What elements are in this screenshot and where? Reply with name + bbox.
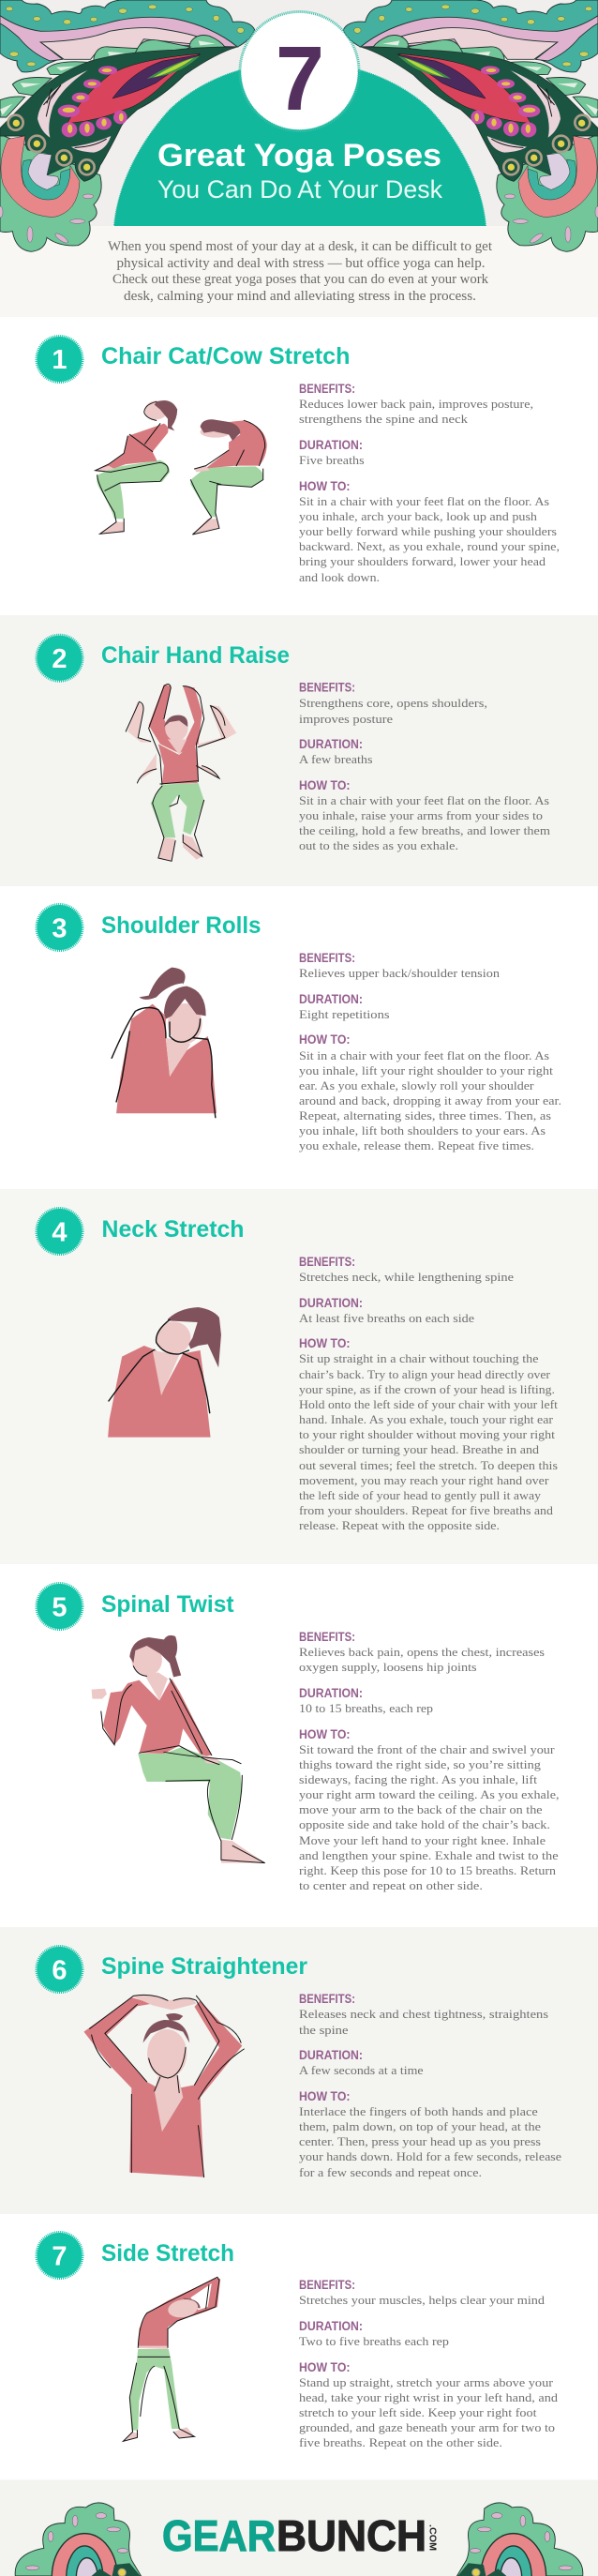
- footer ornament left: [15, 2503, 142, 2576]
- text: benefits, duration, how to: Hold onto the left side of your chair with your left: [299, 1397, 558, 1411]
- badge 4: [37, 1208, 82, 1255]
- badge 6: 6: [52, 1956, 67, 1986]
- text: benefits, duration, how to: for a few seconds and repeat once.: [299, 2165, 482, 2179]
- intro text: When you spend most of your day at a desk, it can be difficult to get: [108, 239, 492, 254]
- text: benefits, duration, how to: out several times; feel the stretch. To deepen this: [299, 1458, 558, 1472]
- panel: pose 1: [0, 317, 598, 615]
- text: benefits, duration, how to: to center and repeat on other side.: [299, 1878, 483, 1892]
- text: benefits, duration, how to: center. Then, press your head up as you press: [299, 2134, 541, 2148]
- text: benefits, duration, how to: Sit in a chair with your feet flat on the floor. As: [299, 1048, 549, 1062]
- text: benefits, duration, how to: [299, 2278, 559, 2449]
- text: benefits, duration, how to: bring your shoulders forward, lower your head: [299, 554, 546, 568]
- text: benefits, duration, how to: 10 to 15 breaths, each rep: [299, 1701, 433, 1715]
- text: benefits, duration, how to: Sit toward the front of the chair and swivel your: [299, 1742, 555, 1756]
- panel: pose 5: [0, 1564, 598, 1927]
- text: benefits, duration, how to: from your shoulders. Repeat for five breaths and: [299, 1503, 554, 1517]
- text: benefits, duration, how to: DURATION:: [299, 438, 363, 452]
- text: benefits, duration, how to: HOW TO:: [299, 778, 351, 792]
- intro text: physical activity and deal with stress — but office yoga can help.: [116, 256, 486, 271]
- text: benefits, duration, how to: Relieves back pain, opens the chest, increases: [299, 1645, 545, 1659]
- badge 3: 3: [52, 913, 67, 943]
- text: benefits, duration, how to: them, palm down, on top of your head, at the: [299, 2119, 541, 2133]
- heading: Shoulder Rolls: [101, 912, 261, 939]
- text: benefits, duration, how to: you inhale, lift both shoulders to your ears. As: [299, 1123, 546, 1137]
- badge 2: 2: [52, 644, 67, 674]
- text: benefits, duration, how to: ear. As you exhale, slowly roll your shoulder: [299, 1078, 534, 1092]
- panel: pose 6: [0, 1927, 598, 2214]
- text: benefits, duration, how to: thighs toward the right side, so you’re sitting: [299, 1757, 542, 1771]
- text: benefits, duration, how to: HOW TO:: [299, 2089, 351, 2103]
- heading: Neck Stretch: [101, 1216, 244, 1243]
- text: benefits, duration, how to: strengthens the spine and neck: [299, 412, 469, 426]
- text: benefits, duration, how to: sideways, facing the right. As you inhale, lift: [299, 1772, 537, 1786]
- text: benefits, duration, how to: BENEFITS:: [299, 1255, 355, 1269]
- text: benefits, duration, how to: head, take your right wrist in your left hand, and: [299, 2390, 559, 2404]
- logo: GearBunch.com: [162, 2511, 437, 2560]
- text: benefits, duration, how to: stretch to your left side. Keep your right foot: [299, 2405, 537, 2419]
- badge 1: [37, 336, 82, 383]
- text: benefits, duration, how to: Strengthens core, opens shoulders,: [299, 696, 487, 710]
- text: benefits, duration, how to: HOW TO:: [299, 2360, 351, 2374]
- heading: Spinal Twist: [101, 1591, 234, 1618]
- text: benefits, duration, how to: BENEFITS:: [299, 382, 355, 396]
- text: benefits, duration, how to: your belly forward while pushing your shoulders: [299, 524, 557, 538]
- text: benefits, duration, how to: the ceiling, hold a few breaths, and lower them: [299, 823, 550, 837]
- text: benefits, duration, how to: Reduces lower back pain, improves posture,: [299, 397, 533, 411]
- illustration: hands on head: [83, 1995, 244, 2177]
- badge 1: 1: [52, 345, 67, 375]
- text: benefits, duration, how to: Sit in a chair with your feet flat on the floor. As: [299, 494, 549, 508]
- text: benefits, duration, how to: A few seconds at a time: [299, 2063, 424, 2077]
- text: benefits, duration, how to: oxygen supply, loosens hip joints: [299, 1660, 477, 1674]
- logo: GearBunch.com: GEAR: [162, 2511, 276, 2560]
- text: benefits, duration, how to: Sit in a chair with your feet flat on the floor. As: [299, 793, 549, 807]
- heading: Spine Straightener: [101, 1953, 307, 1980]
- illustration: standing side stretch: [123, 2277, 220, 2441]
- text: benefits, duration, how to: BENEFITS:: [299, 1992, 355, 2006]
- text: benefits, duration, how to: Releases neck and chest tightness, straightens: [299, 2007, 548, 2021]
- panel: pose 7: [0, 2214, 598, 2479]
- text: benefits, duration, how to: five breaths. Repeat on the other side.: [299, 2435, 502, 2449]
- illustration: neck stretch: [108, 1307, 221, 1438]
- badge 7: 7: [52, 2241, 67, 2271]
- text: benefits, duration, how to: A few breaths: [299, 752, 373, 766]
- text: benefits, duration, how to: [299, 1255, 558, 1532]
- text: benefits, duration, how to: improves posture: [299, 712, 393, 726]
- badge 6: [37, 1947, 82, 1992]
- text: benefits, duration, how to: move your arm to the back of the chair on the: [299, 1802, 543, 1816]
- text: benefits, duration, how to: your right arm toward the ceiling. As you exhale,: [299, 1787, 559, 1801]
- text: benefits, duration, how to: opposite side and take hold of the chair’s back.: [299, 1817, 550, 1831]
- text: benefits, duration, how to: DURATION:: [299, 1686, 363, 1700]
- text: benefits, duration, how to: HOW TO:: [299, 1336, 351, 1350]
- text: benefits, duration, how to: around and back, dropping it away from your ear.: [299, 1093, 561, 1107]
- text: benefits, duration, how to: hand. Inhale. As you exhale, touch your right ear: [299, 1412, 554, 1426]
- footer ornament right: [456, 2503, 583, 2576]
- heading: Chair Hand Raise: [101, 642, 290, 669]
- badge 4: 4: [52, 1217, 67, 1247]
- text: benefits, duration, how to: Stretches neck, while lengthening spine: [299, 1270, 514, 1284]
- white circle with numeral 7: [240, 11, 359, 131]
- panel: pose 4: [0, 1189, 598, 1564]
- text: benefits, duration, how to: you inhale, lift your right shoulder to your right: [299, 1063, 553, 1077]
- text: benefits, duration, how to: the spine: [299, 2023, 349, 2037]
- text: benefits, duration, how to: the left side of your head to gently pull it away: [299, 1488, 542, 1502]
- illustration: seated spinal twist: [92, 1635, 265, 1863]
- text: benefits, duration, how to: DURATION:: [299, 2319, 363, 2333]
- text: benefits, duration, how to: movement, you may reach your right hand over: [299, 1473, 549, 1487]
- panel: footer: [0, 2479, 598, 2576]
- intro text: Check out these great yoga poses that you can do even at your work: [112, 272, 489, 287]
- white circle with numeral 7: 7: [276, 27, 324, 129]
- badge 2: [37, 635, 82, 681]
- logo: GearBunch.com: BUNCH: [277, 2511, 426, 2560]
- illustration: cat and cow poses: [96, 400, 267, 535]
- text: benefits, duration, how to: [299, 1992, 561, 2179]
- badge 7: [37, 2232, 82, 2279]
- text: benefits, duration, how to: you inhale, raise your arms from your sides to: [299, 808, 543, 822]
- text: benefits, duration, how to: Eight repetitions: [299, 1007, 390, 1021]
- title: Great Yoga Poses: [157, 138, 441, 173]
- intro text: [108, 239, 492, 304]
- text: benefits, duration, how to: to your right shoulder without moving your right: [299, 1427, 555, 1441]
- text: benefits, duration, how to: BENEFITS:: [299, 2278, 355, 2292]
- text: benefits, duration, how to: BENEFITS:: [299, 1630, 355, 1644]
- badge 3: [37, 904, 82, 951]
- badge 5: 5: [52, 1592, 67, 1622]
- text: benefits, duration, how to: DURATION:: [299, 737, 363, 751]
- text: benefits, duration, how to: Stretches your muscles, helps clear your mind: [299, 2293, 546, 2307]
- text: benefits, duration, how to: [299, 681, 550, 852]
- text: benefits, duration, how to: Stand up straight, stretch your arms above your: [299, 2375, 554, 2389]
- text: benefits, duration, how to: you inhale, arch your back, look up and push: [299, 509, 538, 523]
- left paisley ornament: [0, 0, 255, 251]
- text: benefits, duration, how to: At least five breaths on each side: [299, 1311, 474, 1325]
- text: benefits, duration, how to: Interlace the fingers of both hands and place: [299, 2104, 538, 2118]
- text: benefits, duration, how to: your hands down. Hold for a few seconds, release: [299, 2149, 561, 2163]
- text: benefits, duration, how to: BENEFITS:: [299, 951, 355, 965]
- heading: Chair Cat/Cow Stretch: [101, 343, 351, 369]
- text: benefits, duration, how to: Two to five breaths each rep: [299, 2334, 449, 2348]
- text: benefits, duration, how to: Sit up straight in a chair without touching the: [299, 1351, 539, 1365]
- text: benefits, duration, how to: backward. Next, as you exhale, round your spine,: [299, 539, 560, 553]
- text: benefits, duration, how to: DURATION:: [299, 992, 363, 1006]
- text: benefits, duration, how to: and lengthen your spine. Exhale and twist to the: [299, 1848, 559, 1862]
- text: benefits, duration, how to: [299, 382, 560, 584]
- heading: Side Stretch: [101, 2240, 234, 2267]
- text: benefits, duration, how to: your spine, as if the crown of your head is lifting.: [299, 1382, 555, 1396]
- text: benefits, duration, how to: BENEFITS:: [299, 681, 355, 695]
- text: benefits, duration, how to: right. Keep this pose for 10 to 15 breaths. Return: [299, 1863, 557, 1877]
- text: benefits, duration, how to: you exhale, release them. Repeat five times.: [299, 1138, 534, 1152]
- teal dome banner: [113, 68, 486, 226]
- illustration: shoulder roll: [112, 968, 217, 1118]
- text: benefits, duration, how to: DURATION:: [299, 1296, 363, 1310]
- text: benefits, duration, how to: HOW TO:: [299, 479, 351, 493]
- text: benefits, duration, how to: Move your left hand to your right knee. Inhale: [299, 1833, 546, 1847]
- text: benefits, duration, how to: shoulder or turning your head. Breathe in and: [299, 1442, 540, 1456]
- badge 5: [37, 1583, 82, 1630]
- text: benefits, duration, how to: out to the sides as you exhale.: [299, 838, 458, 852]
- right paisley ornament: [343, 0, 598, 251]
- text: benefits, duration, how to: HOW TO:: [299, 1032, 351, 1047]
- panel: pose 2: [0, 615, 598, 886]
- text: benefits, duration, how to: DURATION:: [299, 2048, 363, 2062]
- text: benefits, duration, how to: grounded, and gaze beneath your arm for two to: [299, 2420, 555, 2434]
- intro text: desk, calming your mind and alleviating stress in the process.: [124, 289, 476, 304]
- logo: GearBunch.com: .COM: [427, 2524, 437, 2551]
- text: benefits, duration, how to: HOW TO:: [299, 1727, 351, 1741]
- header background: [0, 0, 598, 317]
- panel: pose 3: [0, 886, 598, 1189]
- title: [157, 138, 443, 203]
- text: benefits, duration, how to: Repeat, alternating sides, three times. Then, as: [299, 1108, 551, 1122]
- text: benefits, duration, how to: and look down.: [299, 570, 380, 584]
- text: benefits, duration, how to: Five breaths: [299, 453, 365, 467]
- illustration: arms raised: [126, 685, 236, 861]
- text: benefits, duration, how to: Relieves upper back/shoulder tension: [299, 966, 501, 980]
- text: benefits, duration, how to: [299, 1630, 559, 1892]
- title: You Can Do At Your Desk: [157, 175, 443, 203]
- text: benefits, duration, how to: [299, 951, 561, 1152]
- text: benefits, duration, how to: release. Repeat with the opposite side.: [299, 1518, 500, 1532]
- text: benefits, duration, how to: chair’s back. Try to align your head directly over: [299, 1367, 551, 1381]
